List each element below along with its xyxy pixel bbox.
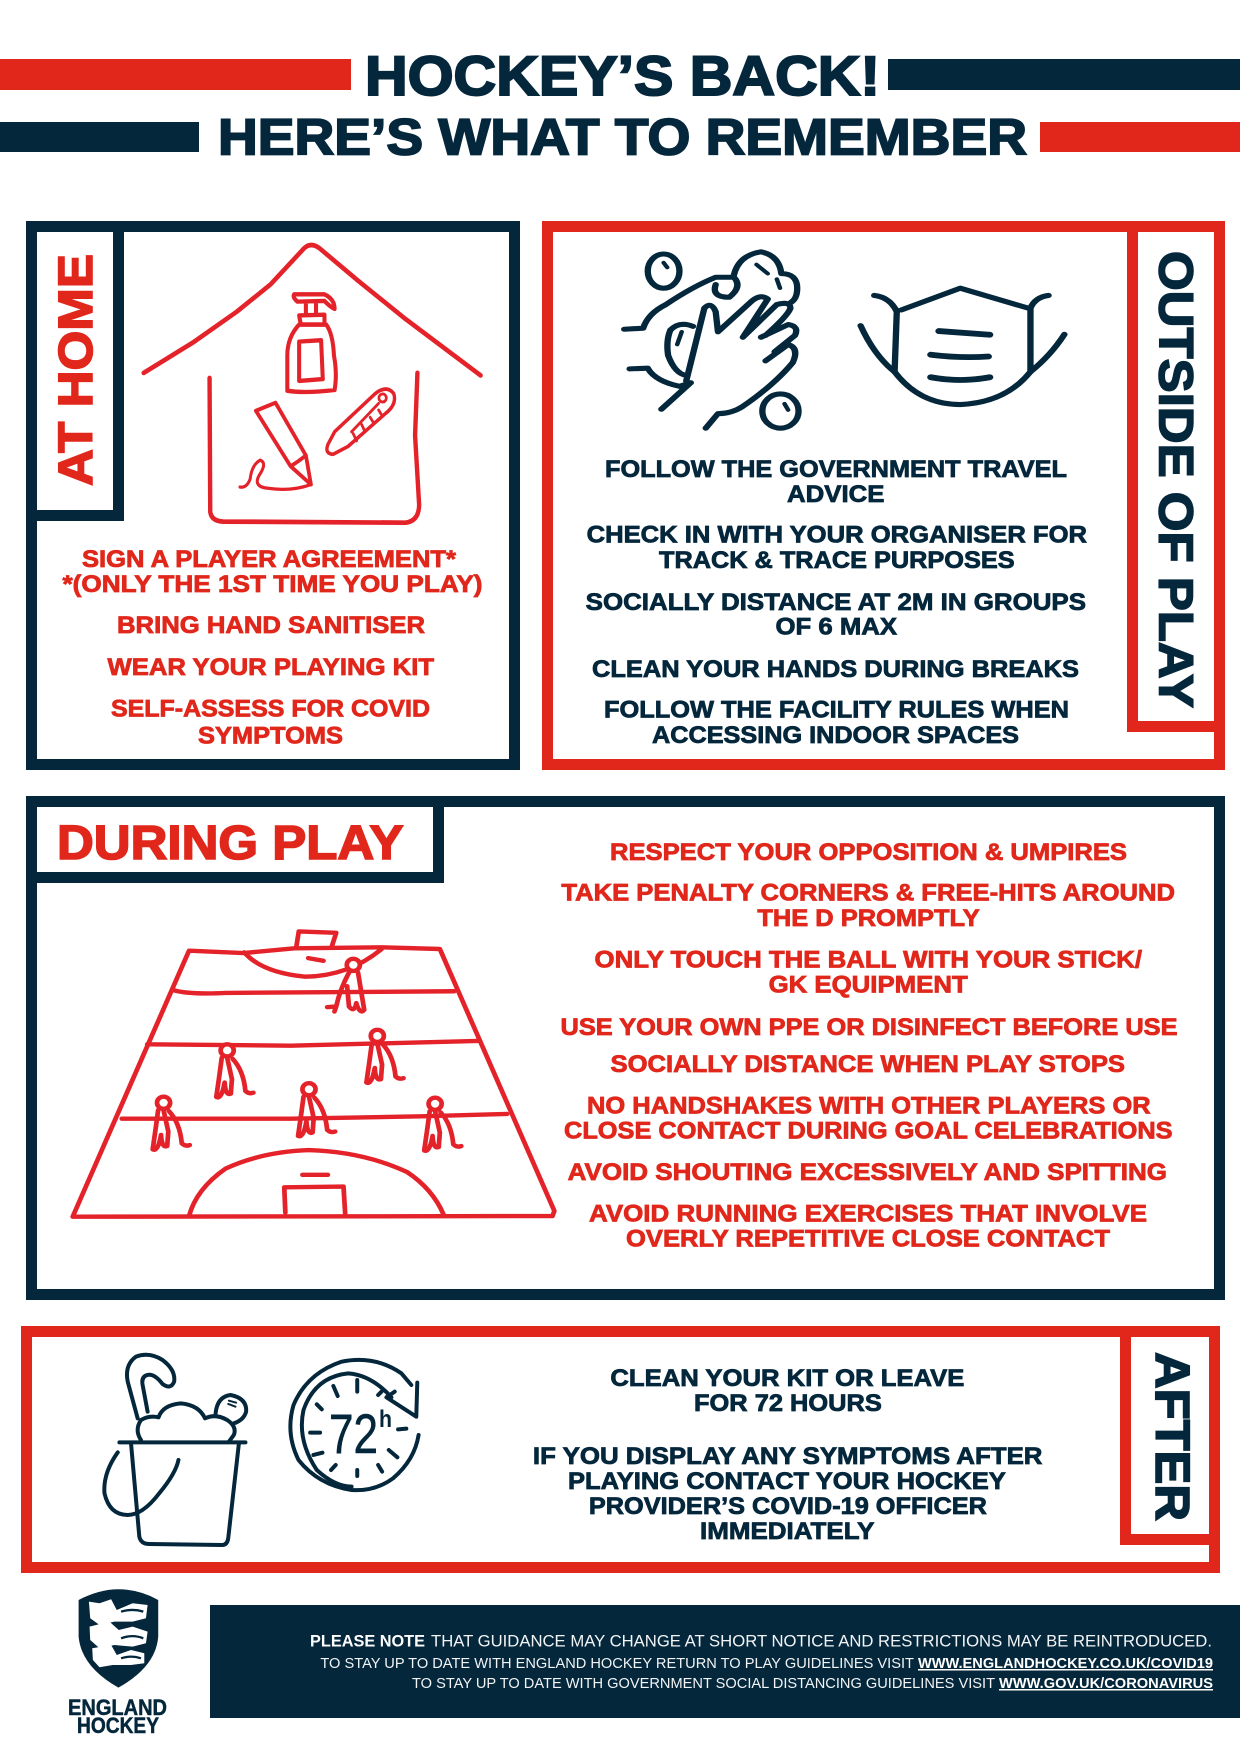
text block: outside of play guidance: SOCIALLY DISTANCE AT 2M IN GROUPS <box>586 589 1086 616</box>
text block: after guidance: PROVIDER’S COVID-19 OFFICER <box>589 1493 987 1520</box>
icon: washing hands <box>624 252 799 428</box>
text block: during play guidance: AVOID RUNNING EXERCISES THAT INVOLVE <box>589 1201 1147 1228</box>
text block: at home guidance: *(ONLY THE 1ST TIME YOU PLAY) <box>62 571 482 598</box>
text block: after guidance: IF YOU DISPLAY ANY SYMPTOMS AFTER <box>533 1443 1042 1470</box>
text block: at home guidance: SELF-ASSESS FOR COVID <box>111 696 430 722</box>
text block: after guidance: PLAYING CONTACT YOUR HOCKEY <box>568 1468 1006 1495</box>
icon: 72 hour clock: h <box>379 1406 392 1433</box>
footer note bar: THAT GUIDANCE MAY CHANGE AT SHORT NOTICE AND RESTRICTIONS MAY BE REINTRODUCED. <box>431 1633 1212 1651</box>
logo: england hockey: HOCKEY <box>77 1713 159 1738</box>
text block: outside of play guidance: ACCESSING INDOOR SPACES <box>652 722 1019 749</box>
player 3 <box>153 1097 190 1150</box>
text block: outside of play guidance <box>586 456 1087 749</box>
chart: hockey pitch with players <box>73 931 554 1217</box>
logo: england hockey <box>68 1589 167 1738</box>
text block: during play guidance <box>560 839 1178 1253</box>
text block: at home guidance: SYMPTOMS <box>198 722 343 750</box>
text block: during play guidance: SOCIALLY DISTANCE WHEN PLAY STOPS <box>610 1051 1125 1078</box>
player: goalkeeper <box>327 959 364 1012</box>
icon: shield with three lions <box>79 1589 158 1688</box>
panel: during play <box>32 802 1220 1294</box>
panel: outside of play <box>548 226 1220 764</box>
heading: during play: DURING PLAY <box>57 816 404 870</box>
text block: during play guidance: TAKE PENALTY CORNERS & FREE-HITS AROUND <box>561 880 1175 907</box>
footer text: government guidelines: TO STAY UP TO DATE WITH GOVERNMENT SOCIAL DISTANCING GUIDELINES VISIT <box>412 1675 995 1692</box>
wordmark: ENGLAND <box>68 1695 167 1720</box>
footer note bar: WWW.GOV.UK/CORONAVIRUS <box>999 1675 1213 1692</box>
title banner <box>0 44 1240 166</box>
text block: during play guidance: RESPECT YOUR OPPOSITION & UMPIRES <box>610 839 1127 866</box>
text block: outside of play guidance: CLEAN YOUR HANDS DURING BREAKS <box>592 656 1079 683</box>
text block: during play guidance: ONLY TOUCH THE BALL WITH YOUR STICK/ <box>594 946 1142 973</box>
player 1 <box>216 1044 253 1097</box>
heading: here's what to remember: HERE’S WHAT TO REMEMBER <box>218 108 1027 166</box>
heading: hockey's back: HOCKEY’S BACK! <box>365 44 880 107</box>
player 2 <box>366 1030 403 1083</box>
text block: during play guidance: AVOID SHOUTING EXCESSIVELY AND SPITTING <box>568 1159 1167 1186</box>
text block: during play guidance: CLOSE CONTACT DURING GOAL CELEBRATIONS <box>564 1118 1173 1145</box>
footer text: england hockey guidelines: TO STAY UP TO DATE WITH ENGLAND HOCKEY RETURN TO PLAY GUIDELINES VISIT <box>320 1655 914 1672</box>
text block: at home guidance: SIGN A PLAYER AGREEMENT* <box>82 546 457 573</box>
icon: face mask <box>861 288 1064 405</box>
text block: after guidance: IMMEDIATELY <box>700 1518 874 1545</box>
text block: during play guidance: THE D PROMPTLY <box>757 905 980 932</box>
heading: at home: AT HOME <box>49 254 103 486</box>
text block: outside of play guidance: OF 6 MAX <box>776 614 897 641</box>
text block: during play guidance: NO HANDSHAKES WITH OTHER PLAYERS OR <box>587 1093 1151 1120</box>
text block: during play guidance: OVERLY REPETITIVE CLOSE CONTACT <box>626 1226 1110 1253</box>
text block: after guidance: CLEAN YOUR KIT OR LEAVE <box>610 1365 964 1392</box>
footer note bar <box>210 1605 1240 1718</box>
text block: during play guidance: USE YOUR OWN PPE OR DISINFECT BEFORE USE <box>560 1014 1178 1041</box>
icon: bucket with stick and ball <box>104 1355 246 1545</box>
icon: 72 hour clock <box>290 1360 419 1490</box>
text block: after guidance: FOR 72 HOURS <box>694 1390 882 1417</box>
text block: outside of play guidance: FOLLOW THE GOVERNMENT TRAVEL <box>605 456 1067 483</box>
text block: outside of play guidance: TRACK & TRACE PURPOSES <box>659 547 1015 574</box>
footer text: please note: PLEASE NOTE <box>310 1633 425 1651</box>
player 4 <box>298 1083 335 1136</box>
icon: house with sanitiser, pen and thermometer <box>144 245 481 523</box>
text block: outside of play guidance: CHECK IN WITH YOUR ORGANISER FOR <box>587 522 1087 549</box>
text block: during play guidance: GK EQUIPMENT <box>769 972 968 999</box>
icon: 72 hour clock: 72 <box>329 1402 378 1465</box>
text block: at home guidance: WEAR YOUR PLAYING KIT <box>108 654 434 681</box>
heading: after: AFTER <box>1145 1352 1199 1521</box>
footer note bar: WWW.ENGLANDHOCKEY.CO.UK/COVID19 <box>918 1655 1213 1672</box>
player 5 <box>424 1098 461 1151</box>
panel: at home <box>32 226 514 764</box>
heading: outside of play: OUTSIDE OF PLAY <box>1148 251 1202 708</box>
text block: outside of play guidance: ADVICE <box>787 481 884 508</box>
text block: after guidance <box>533 1365 1042 1545</box>
text block: outside of play guidance: FOLLOW THE FACILITY RULES WHEN <box>604 697 1069 724</box>
text block: at home guidance <box>62 546 482 750</box>
panel: after <box>26 1331 1214 1568</box>
text block: at home guidance: BRING HAND SANITISER <box>117 612 425 639</box>
